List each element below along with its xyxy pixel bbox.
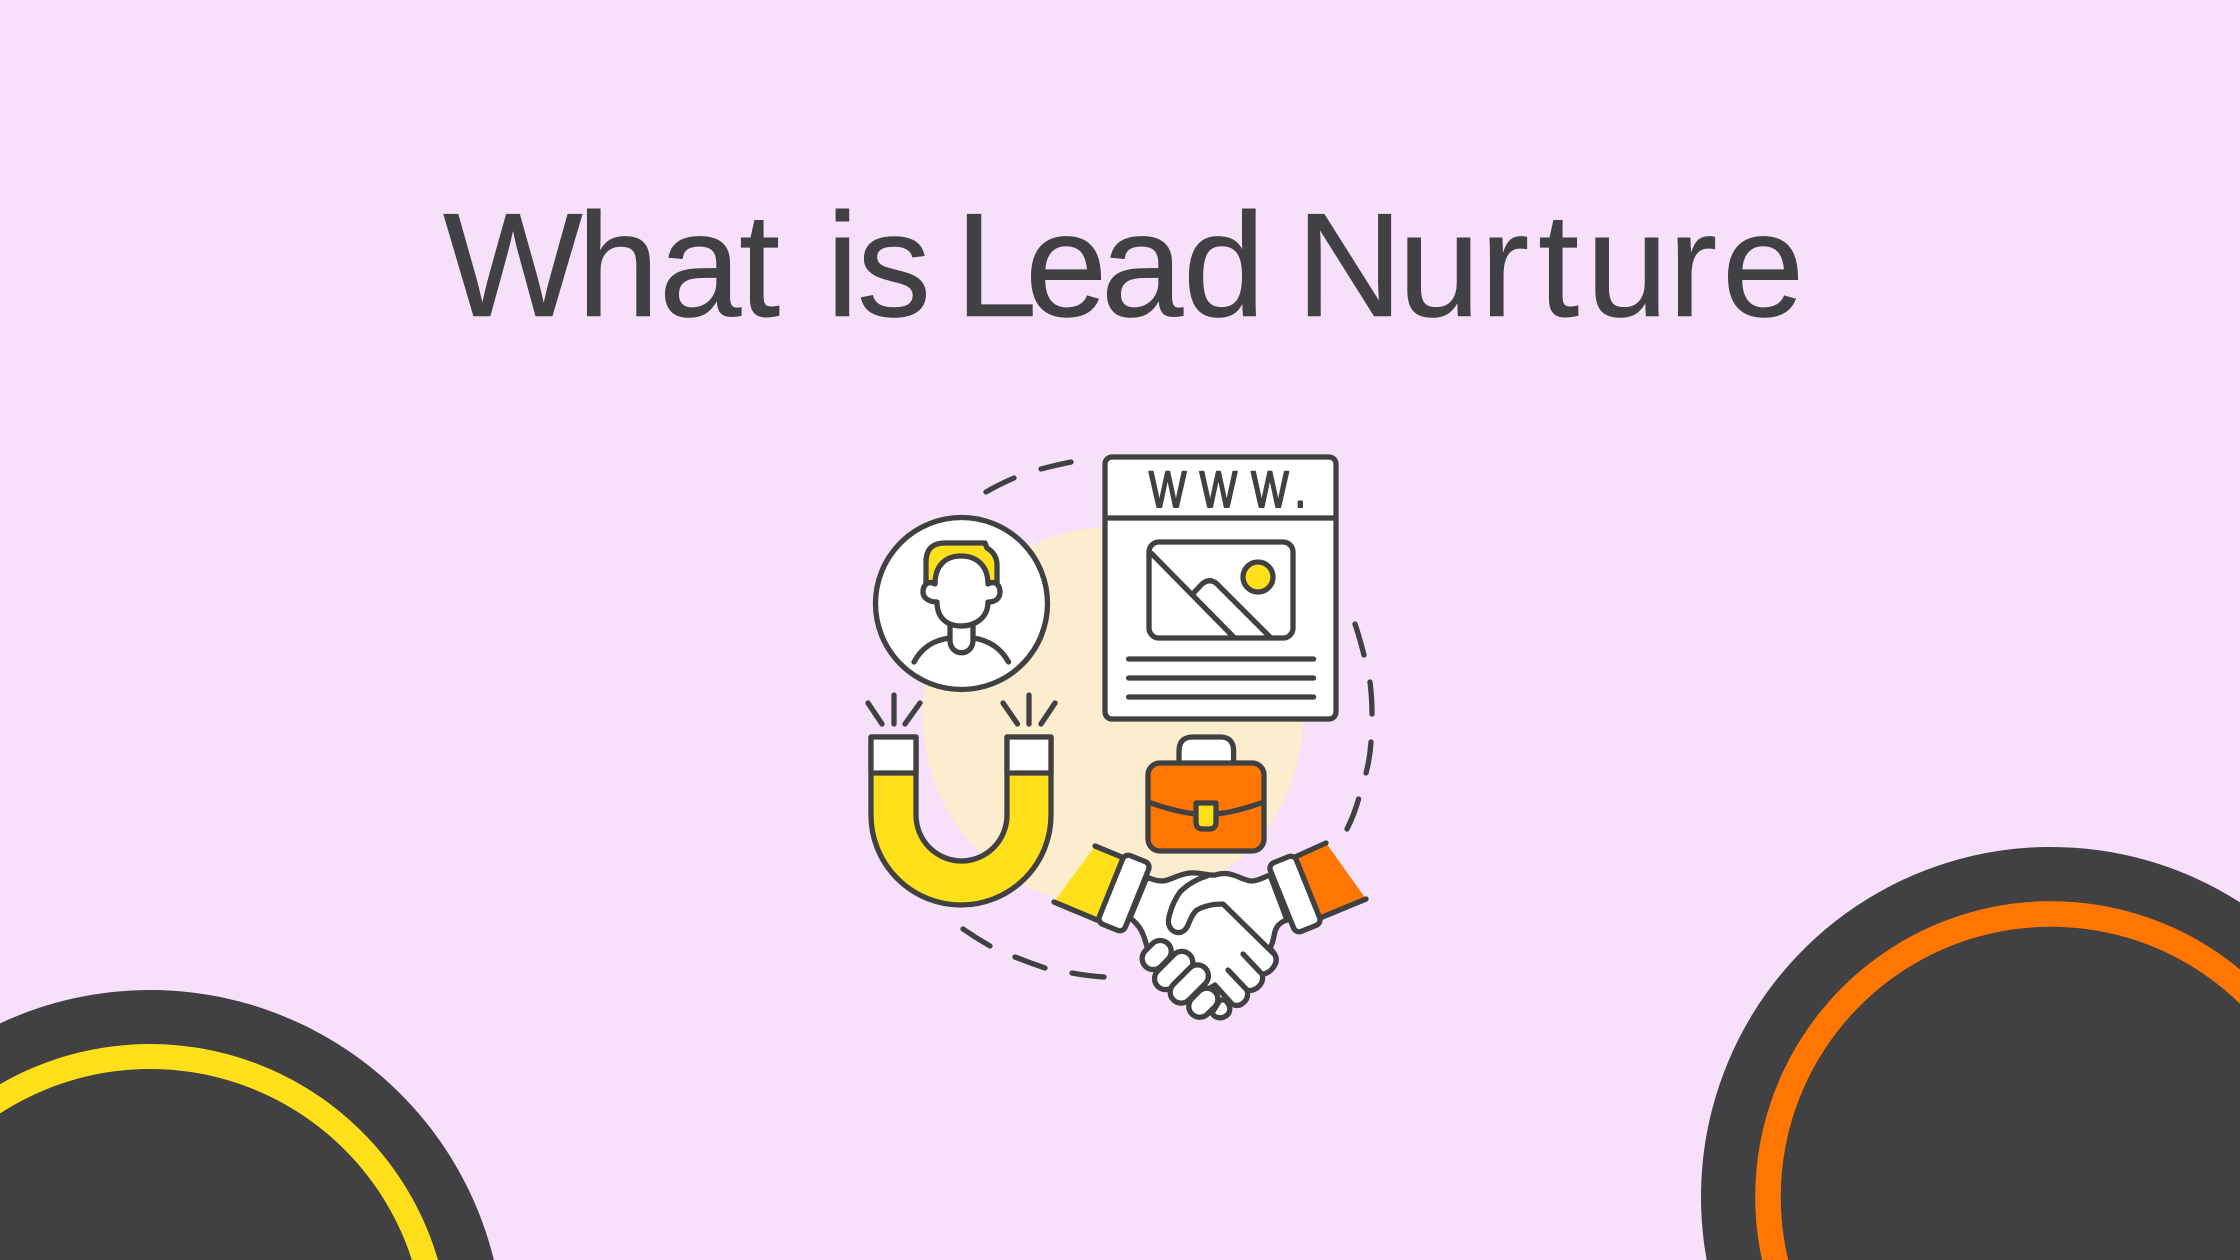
icon: web page [1105, 457, 1336, 719]
icon: magnet [868, 695, 1055, 905]
dashed orbit arc [963, 462, 1372, 977]
title: What is Lead Nurture [443, 183, 1804, 348]
background beige blob [923, 527, 1303, 907]
small finger [1212, 1000, 1230, 1018]
web address text: WWW. [1149, 461, 1306, 518]
thumb [1168, 876, 1273, 953]
illustration: lead nurture icons [868, 457, 1372, 1022]
corner shape: bottom-right dark circle with orange ring [1701, 847, 2240, 1260]
left sleeve [1054, 846, 1124, 920]
corner shape: bottom-left dark circle with yellow ring [0, 990, 494, 1260]
left cuff [1097, 853, 1151, 933]
text lines [1129, 659, 1314, 697]
hands [1130, 873, 1287, 1005]
right sleeve [1295, 843, 1366, 917]
icon: briefcase [1148, 737, 1264, 851]
left-hand fingers [1138, 936, 1222, 1022]
icon: handshake [1054, 843, 1366, 1022]
icon: person in circle [876, 518, 1048, 690]
image placeholder [1149, 542, 1293, 638]
magnet force ticks [868, 695, 1055, 724]
right cuff [1268, 854, 1322, 934]
